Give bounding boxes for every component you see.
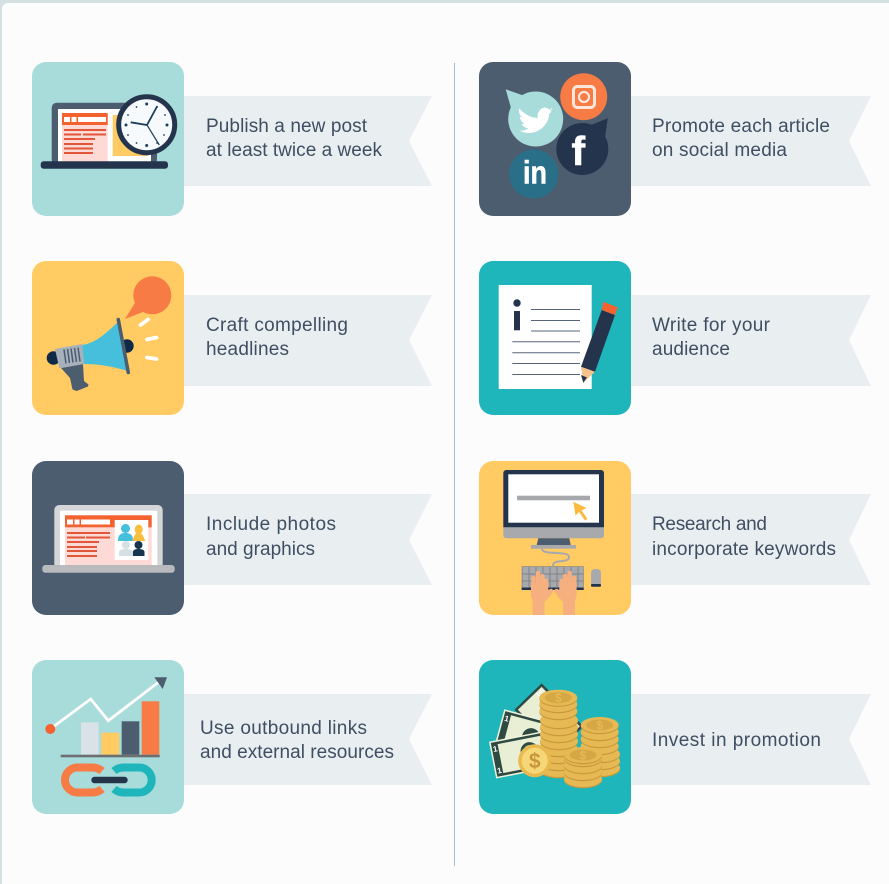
right hand [557,573,577,615]
tile [32,461,184,615]
icon: social media bubbles [506,73,608,198]
caption: on social media [652,140,787,161]
caption [652,116,830,161]
icon: megaphone [47,276,171,391]
ribbon [631,96,871,186]
tile [479,461,631,615]
caption: incorporate keywords [652,539,836,560]
panel: write for your audience [479,261,871,415]
tile [479,261,631,415]
icon: document and pencil [499,285,618,389]
caption: at least twice a week [206,140,382,161]
tile [32,660,184,814]
caption: Invest in promotion [652,730,821,751]
ribbon [184,295,432,386]
icon: money and coins [489,683,620,788]
caption: and external resources [200,742,394,763]
icon: computer, keyboard and hands [503,470,604,615]
panel: include photos and graphics [32,461,432,615]
left hand [531,573,551,615]
ribbon [631,494,871,585]
panel: invest in promotion [479,660,871,814]
caption [652,315,771,360]
panel: promote on social media [479,62,871,216]
tile [32,62,184,216]
panel: craft compelling headlines [32,261,432,415]
icon: money and coins: 1 [492,744,499,754]
ribbon [184,96,432,186]
caption: headlines [206,339,289,360]
caption: Research and [652,514,767,535]
caption: Include photos [206,514,336,535]
caption: Craft compelling [206,315,348,336]
icon: money and coins: 1 [534,688,545,698]
ribbon [184,494,432,585]
caption [206,315,348,360]
icon: chart and chain link [45,677,167,792]
caption [652,514,836,560]
panel: outbound links [32,660,432,814]
ribbon [631,295,871,386]
icon: money and coins: 1 [503,714,511,724]
caption: audience [652,339,730,360]
icon: laptop with photos [42,505,175,573]
tile [479,62,631,216]
coin stack: front: $ [580,748,587,762]
caption [200,718,394,763]
tile [479,660,631,814]
panel: publish a new post [32,62,432,216]
icon: social media bubbles: f [572,128,586,174]
coin stack: right: $ [596,718,603,732]
caption: Promote each article [652,116,830,137]
icon: social media bubbles: in [523,154,547,190]
icon: laptop and clock [41,97,175,169]
caption [206,116,382,161]
icon: money and coins: 1 [496,766,503,776]
caption: Write for your [652,315,771,336]
coin stack: tall: $ [555,691,562,705]
caption: Publish a new post [206,116,368,137]
ribbon [631,694,871,785]
big coin: $ [529,750,541,773]
caption: and graphics [206,539,315,560]
tile [32,261,184,415]
caption: Use outbound links [200,718,367,739]
panel: research keywords [479,461,871,615]
ribbon [184,694,432,785]
caption [206,514,336,560]
